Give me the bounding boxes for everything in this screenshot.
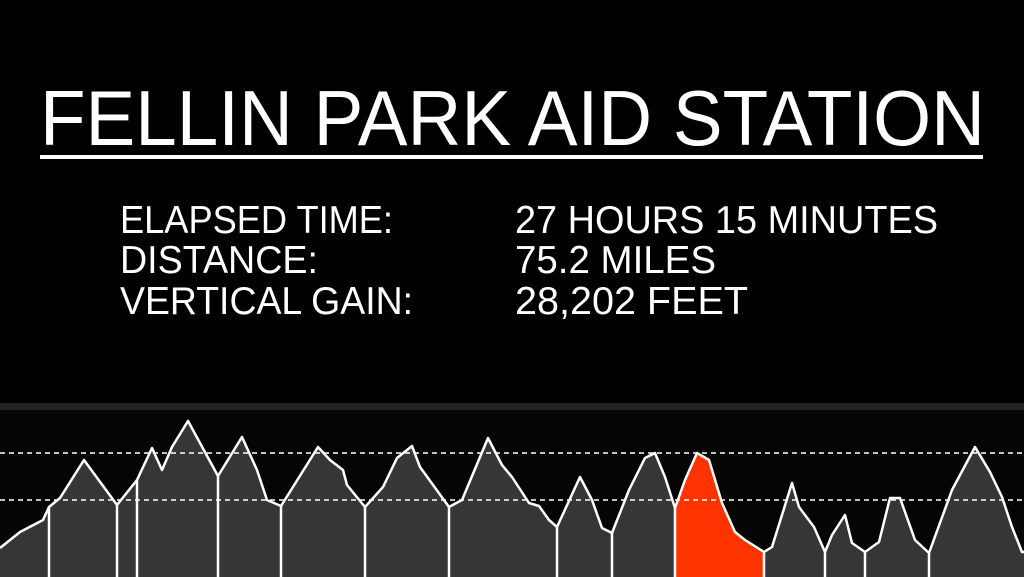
highlighted segment: Fellin Park bbox=[675, 453, 764, 577]
stats labels: ELAPSED TIME: bbox=[120, 199, 393, 242]
stats labels: DISTANCE: bbox=[120, 239, 318, 282]
title: FELLIN PARK AID STATION bbox=[40, 74, 985, 162]
elevation profile chart bbox=[0, 403, 1024, 577]
stats labels: VERTICAL GAIN: bbox=[120, 280, 413, 323]
stats values: 28,202 FEET bbox=[515, 280, 748, 323]
stats values bbox=[515, 199, 938, 323]
stats values: 75.2 MILES bbox=[515, 239, 716, 282]
stats labels bbox=[120, 199, 413, 323]
stats values: 27 HOURS 15 MINUTES bbox=[515, 199, 938, 242]
